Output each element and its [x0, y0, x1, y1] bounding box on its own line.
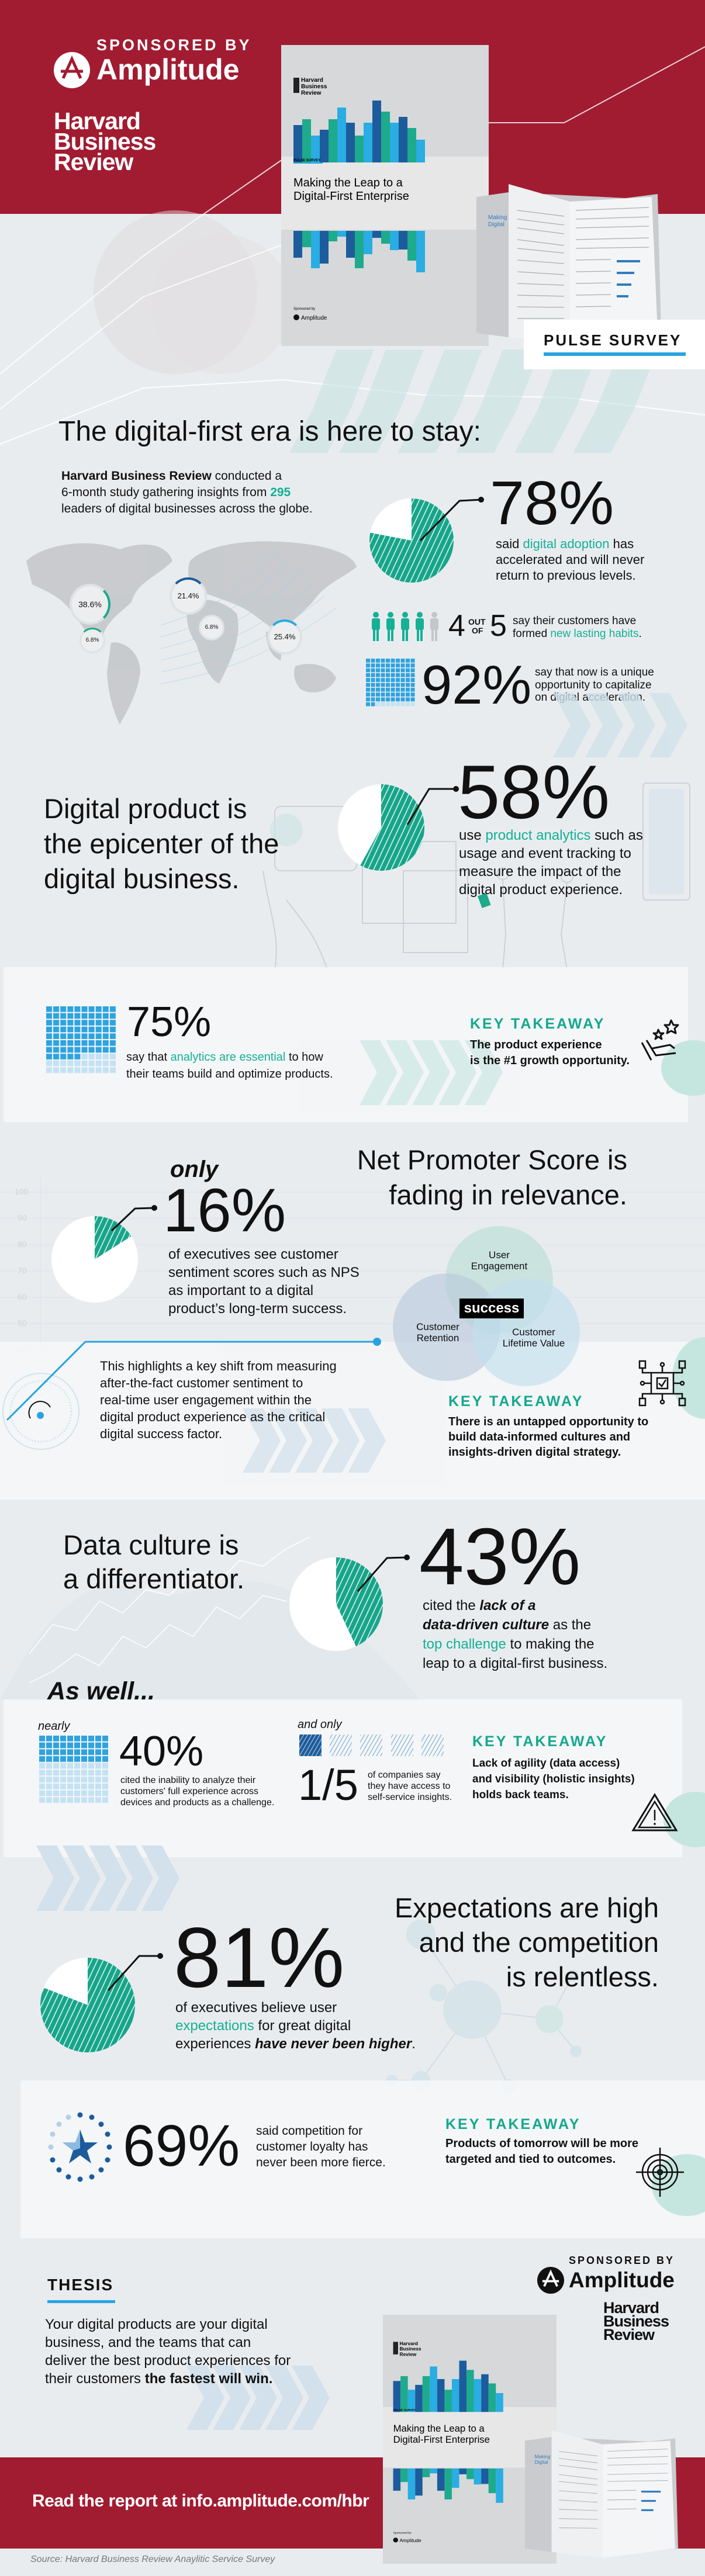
icon: star with dots [47, 2113, 113, 2181]
text shift: real-time user engagement within the [100, 1393, 312, 1407]
panel: analytics [4, 967, 688, 1122]
text 16%: of executives see customer [168, 1247, 338, 1262]
pie 16% [51, 1205, 157, 1303]
report cover top: PULSE SURVEY [293, 159, 320, 162]
stat 40%: 40% [119, 1728, 203, 1775]
sponsor logo top [54, 36, 252, 88]
sponsor logo top: SPONSORED BY [96, 36, 252, 54]
panel: nps shift [0, 1342, 705, 1500]
report cover top: Amplitude [301, 315, 327, 321]
stat 43%: 43% [419, 1512, 580, 1602]
label customer retention: Customer Retention [416, 1321, 459, 1344]
HBR logo top [54, 108, 155, 175]
text 43%: leap to a digital-first business. [423, 1656, 607, 1671]
section 3 background grid: 50 [18, 1318, 27, 1328]
map callout 25.4% [267, 619, 302, 655]
text shift: digital success factor. [100, 1427, 222, 1441]
icon: target [636, 2148, 684, 2197]
text: targeted and tied to outcomes. [445, 2153, 616, 2166]
key takeaway 2: KEY TAKEAWAY [448, 1393, 583, 1410]
text 81%: expectations for great digital [175, 2018, 351, 2034]
sponsor logo bottom: SPONSORED BY [569, 2255, 675, 2266]
report cover top: Harvard [301, 77, 323, 84]
text 1/5: of companies say [368, 1770, 441, 1780]
text: The product experience [470, 1038, 602, 1051]
text 75%: their teams build and optimize products. [126, 1068, 333, 1081]
stat 4 out of 5 [448, 609, 507, 643]
cta red band: Read the report at info.amplitude.com/hbr [32, 2491, 369, 2511]
HBR logo top: Business [54, 128, 155, 155]
report cover bottom: PULSE SURVEY [393, 2409, 416, 2412]
thesis text: their customers the fastest will win. [45, 2371, 272, 2387]
text 1/5: they have access to [368, 1781, 450, 1791]
text 43%: top challenge to making the [423, 1636, 595, 1652]
decoration teal circle 4 [652, 2154, 705, 2216]
section 4 heading: Data culture is [63, 1529, 239, 1560]
text 69% [256, 2123, 386, 2170]
text 58%: use product analytics such as [459, 827, 643, 843]
stat 1/5: 1/5 [298, 1761, 358, 1809]
text 43%: cited the lack of a [423, 1598, 535, 1614]
report cover bottom: Review [399, 2351, 417, 2357]
label success: success [464, 1300, 519, 1316]
text 4 of 5: say their customers have [513, 615, 636, 627]
report cover top [281, 45, 489, 346]
text 78%: return to previous levels. [496, 568, 636, 583]
section 3 heading: Net Promoter Score is [357, 1144, 627, 1175]
pie 58% [338, 784, 459, 871]
key takeaway 4: KEY TAKEAWAY [445, 2116, 580, 2132]
text 16%: as important to a digital [168, 1283, 313, 1299]
and only label: and only [298, 1718, 342, 1731]
text 4 of 5 [513, 615, 642, 640]
decoration teal circle 2 [672, 1337, 705, 1419]
text 78%: said digital adoption has [496, 536, 634, 551]
text: is the #1 growth opportunity. [470, 1054, 630, 1067]
stat 4 out of 5: 4 [448, 609, 465, 643]
text 69%: said competition for [256, 2124, 362, 2138]
text shift: after-the-fact customer sentiment to [100, 1376, 303, 1390]
open report bottom: Making [535, 2454, 550, 2460]
as well heading: As well... [47, 1677, 155, 1705]
open report bottom: Digital [535, 2460, 548, 2465]
text: There is an untapped opportunity to [448, 1415, 648, 1428]
text 92%: opportunity to capitalize [535, 679, 652, 691]
section 5 heading: and the competition [419, 1927, 659, 1958]
section 3 background grid [0, 1175, 705, 1354]
map callout 25.4%: 25.4% [274, 632, 295, 641]
source note: Source: Harvard Business Review Anaylitic Service Survey [30, 2554, 275, 2564]
section 5 heading: Expectations are high [395, 1892, 659, 1923]
text 81%: of executives believe user [175, 2000, 337, 2016]
text 92%: say that now is a unique [535, 666, 654, 678]
map callout 38.6%: 38.6% [78, 600, 102, 609]
text 92%: on digital acceleration. [535, 691, 645, 704]
intro text: leaders of digital businesses across the globe. [61, 502, 313, 515]
open report bottom [525, 2430, 678, 2558]
text 40%: devices and products as a challenge. [120, 1798, 274, 1808]
section 5 heading: is relentless. [506, 1961, 659, 1992]
stat 78%: 78% [490, 469, 614, 538]
label user engagement: User Engagement [471, 1249, 527, 1272]
header decoration [0, 46, 705, 453]
report cover top: Making the Leap to a [293, 176, 403, 189]
pie 43% [289, 1554, 410, 1651]
section 4 heading [63, 1529, 244, 1594]
report cover bottom: Amplitude [399, 2537, 421, 2543]
decoration teal circle 1 [661, 1040, 705, 1096]
report cover top: Review [301, 90, 322, 96]
intro text: 6-month study gathering insights from 295 [61, 486, 291, 499]
section 3 heading: fading in relevance. [389, 1179, 627, 1210]
text shift: digital product experience as the critical [100, 1410, 325, 1424]
map callout 6.8% latam [80, 628, 105, 653]
HBR logo top: Review [54, 148, 133, 175]
report cover top: Digital-First Enterprise [293, 190, 409, 203]
section 3 background grid: 90 [18, 1213, 27, 1223]
section 2 heading [44, 793, 279, 894]
map callout 6.8% latam: 6.8% [86, 637, 99, 643]
section 2 heading: the epicenter of the [44, 828, 279, 859]
open report top: Digital [488, 221, 504, 228]
thesis text: Your digital products are your digital [45, 2317, 268, 2332]
word only: only [170, 1157, 218, 1182]
label customer lifetime value: Customer Lifetime Value [503, 1327, 565, 1349]
section 3 background grid: 60 [18, 1292, 27, 1301]
section 3 background grid: 100 [15, 1187, 29, 1196]
report cover top: Business [301, 84, 327, 90]
section 4 heading: a differentiator. [63, 1563, 244, 1594]
map callout 21.4% [170, 577, 207, 615]
report cover bottom: Business [399, 2346, 421, 2352]
decoration teal circle 3 [663, 1792, 705, 1847]
section 3 background grid: 40 [18, 1345, 27, 1354]
chevrons [360, 1040, 503, 1105]
panel: competition [20, 2080, 705, 2238]
thesis heading: THESIS [47, 2276, 113, 2294]
stat 75%: 75% [127, 999, 211, 1045]
stat 4 out of 5: OF [472, 626, 483, 635]
text: build data-informed cultures and [448, 1431, 630, 1443]
text 1/5 [368, 1770, 452, 1802]
HBR logo bottom: Harvard [603, 2299, 659, 2317]
text: Lack of agility (data access) [472, 1757, 620, 1770]
text 78% [496, 536, 644, 583]
section 2 heading: digital business. [44, 863, 239, 894]
text 81%: experiences have never been higher. [175, 2036, 416, 2052]
report cover bottom: Digital-First Enterprise [393, 2434, 490, 2445]
pulse survey label [524, 320, 705, 369]
thesis text: deliver the best product experiences for [45, 2353, 291, 2369]
text: holds back teams. [472, 1789, 569, 1801]
text 58%: digital product experience. [459, 882, 623, 898]
icon: people 4 of 5 [372, 612, 438, 641]
pie 78% [369, 497, 484, 583]
text: insights-driven digital strategy. [448, 1446, 621, 1459]
HBR logo bottom: Review [603, 2326, 654, 2343]
blue timeline line [2, 1338, 381, 1450]
stat 81%: 81% [174, 1910, 344, 2005]
thesis text [45, 2315, 291, 2388]
text 81% [175, 1999, 416, 2053]
stat 4 out of 5: OUT [468, 617, 486, 626]
key takeaway 3: KEY TAKEAWAY [472, 1733, 607, 1750]
icon: warning [632, 1793, 678, 1831]
text 58%: usage and event tracking to [459, 846, 631, 861]
text 92% [535, 666, 654, 704]
stat 16%: 16% [163, 1176, 286, 1245]
text 75% [126, 1051, 333, 1081]
open report top: Making [488, 214, 507, 221]
section 1 heading: The digital-first era is here to stay: [58, 416, 481, 447]
sponsor logo bottom [537, 2255, 671, 2295]
sponsor logo bottom: Amplitude [569, 2268, 675, 2292]
grid 75% [46, 1006, 116, 1073]
report cover bottom: Sponsored by [393, 2532, 412, 2535]
stat 4 out of 5: 5 [490, 609, 507, 643]
sponsor logo top: Amplitude [96, 53, 239, 86]
panel: data culture [4, 1699, 682, 1857]
nearly label: nearly [38, 1720, 70, 1733]
chevrons decoration 1 [553, 693, 687, 757]
stat 58%: 58% [458, 749, 610, 835]
text 69%: never been more fierce. [256, 2156, 386, 2169]
text 75%: say that analytics are essential to how [126, 1051, 323, 1064]
text shift [100, 1359, 337, 1441]
section 5 heading [395, 1891, 659, 1994]
text 58% [459, 827, 643, 898]
text 16%: product’s long-term success. [168, 1301, 347, 1317]
text 78%: accelerated and will never [496, 552, 644, 567]
molecule decoration [374, 1905, 596, 2098]
illustration: product team (faint) [262, 783, 690, 967]
text 16%: sentiment scores such as NPS [168, 1265, 360, 1280]
HBR logo bottom [603, 2301, 669, 2342]
text 43% [423, 1598, 607, 1671]
icon: hand with stars [641, 1019, 679, 1061]
icon: circuit [638, 1360, 686, 1406]
section 3 heading [357, 1144, 627, 1210]
text 1/5: self-service insights. [368, 1792, 452, 1802]
key takeaway 1: KEY TAKEAWAY [470, 1016, 605, 1032]
pulse survey label: PULSE SURVEY [544, 331, 682, 349]
map callout 6.8% europe [199, 615, 224, 640]
grid 40% [39, 1736, 108, 1803]
text: and visibility (holistic insights) [472, 1773, 635, 1785]
chevrons decoration thesis [186, 2366, 333, 2430]
report cover top: Sponsored by [293, 307, 315, 311]
text 4 of 5: formed new lasting habits. [513, 628, 642, 640]
report cover bottom [383, 2315, 557, 2564]
HBR logo top: Harvard [54, 108, 140, 134]
text shift: This highlights a key shift from measuring [100, 1359, 337, 1373]
grid 92% [366, 659, 415, 707]
intro text: Harvard Business Review conducted a [61, 469, 282, 483]
boxes 1 of 5 [299, 1734, 444, 1756]
text 58%: measure the impact of the [459, 864, 621, 880]
pie 81% [40, 1952, 166, 2052]
map callout 6.8% europe: 6.8% [205, 624, 218, 631]
map callout 38.6% [70, 584, 110, 625]
stat 92%: 92% [421, 654, 531, 715]
world map [26, 541, 357, 725]
icon: amplitude [54, 52, 90, 88]
text 69%: customer loyalty has [256, 2140, 368, 2153]
map callout 21.4%: 21.4% [178, 591, 199, 600]
venn diagram [393, 1226, 580, 1386]
cta red band [0, 2457, 705, 2549]
section 3 background grid: 70 [18, 1266, 27, 1275]
label success [459, 1299, 524, 1318]
intro text [61, 469, 313, 515]
open report top [476, 184, 661, 337]
text: Products of tomorrow will be more [445, 2137, 638, 2150]
text 40%: cited the inability to analyze their [120, 1775, 255, 1785]
section 3 background grid: 80 [18, 1239, 27, 1249]
text 16% [168, 1247, 360, 1317]
text 40%: customers' full experience across [120, 1786, 258, 1796]
HBR logo bottom: Business [603, 2312, 669, 2330]
text 43%: data-driven culture as the [423, 1617, 591, 1633]
section 2 heading: Digital product is [44, 793, 247, 824]
report cover bottom: Harvard [399, 2340, 418, 2346]
section 4 background chart [29, 1537, 310, 1683]
header band [0, 0, 705, 214]
chevrons decoration 3 [36, 1846, 182, 1911]
report cover bottom: Making the Leap to a [393, 2423, 485, 2434]
stat 69%: 69% [123, 2113, 240, 2179]
text 40% [120, 1775, 274, 1808]
thesis text: business, and the teams that can [45, 2335, 251, 2350]
